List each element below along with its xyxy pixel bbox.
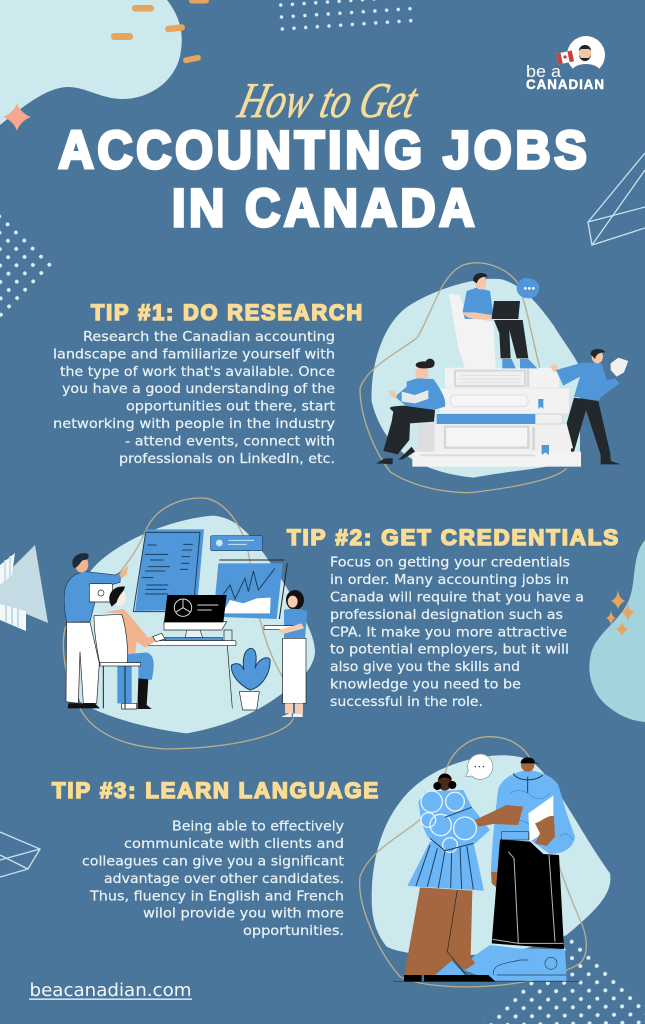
icon: pink star — [3, 103, 31, 131]
blob — [372, 755, 610, 956]
text block: tip 2: also give you the skills and — [330, 660, 520, 675]
tag panel — [211, 536, 263, 551]
heading: tip 2: TIP #2: GET CREDENTIALS — [287, 525, 620, 550]
bottom-left wire shape — [0, 832, 40, 877]
woman — [393, 773, 580, 982]
text block: tip 1: you have a good understanding of the — [62, 382, 335, 397]
heading: tip 3: TIP #3: LEARN LANGUAGE — [52, 778, 380, 803]
speech bubble — [517, 278, 539, 298]
title: How to Get: How to Get — [233, 73, 424, 128]
decorative triangles left — [0, 545, 48, 631]
person with laptop, right — [264, 590, 307, 717]
top-left blob with dashes — [0, 0, 209, 125]
text block: tip 2: Focus on getting your credentials — [330, 556, 570, 571]
text block: tip 2: to potential employers, but it will — [330, 643, 569, 658]
title: In Canada: IN CANADA — [172, 179, 478, 238]
text block: tip 3: colleagues can give you a significant — [82, 854, 344, 870]
text block: tip 3 — [82, 820, 344, 939]
text block: tip 3: wilol provide you with more — [143, 907, 344, 922]
text block: tip 1: networking with people in the industry — [53, 417, 335, 432]
illustration: team at computer — [63, 498, 315, 749]
text block: tip 1: the type of work that's available. Once — [60, 365, 335, 380]
text block: tip 2: successful in the role. — [330, 695, 483, 710]
chair — [449, 293, 496, 368]
seated person — [104, 586, 165, 709]
code panel — [133, 529, 204, 612]
text block: tip 1: landscape and familiarize yourself with — [53, 347, 335, 362]
top-right wire shape — [588, 153, 645, 245]
text block: tip 2: CPA. It make you more attractive — [330, 625, 567, 640]
person reading, left — [376, 359, 445, 464]
desk — [147, 630, 236, 708]
person standing, right — [550, 349, 628, 464]
text block: tip 1: professionals on LinkedIn, etc. — [119, 452, 335, 467]
bottom-right dot pattern — [478, 936, 645, 1024]
logo: be a Canadian: be a — [526, 62, 562, 81]
person standing with tablet — [64, 553, 128, 708]
text block: tip 1: opportunities out there, start — [126, 400, 335, 415]
text block: tip 2: professional designation such as — [330, 608, 563, 623]
text block: tip 1: - attend events, connect with — [125, 434, 335, 449]
text block: tip 2: knowledge you need to be — [330, 678, 521, 692]
illustration: people on books — [360, 263, 628, 493]
outline curve — [63, 498, 293, 749]
speech bubble — [466, 754, 493, 779]
text block: tip 2: Canada will require that you have a — [330, 590, 584, 606]
left dot pattern — [0, 214, 54, 320]
heading: tip 1: TIP #1: DO RESEARCH — [91, 300, 364, 325]
text block: tip 3: advantage over other candidates. — [104, 872, 344, 887]
blob — [372, 279, 580, 478]
man — [463, 757, 575, 981]
text block: tip 1: Research the Canadian accounting — [83, 330, 335, 345]
plant — [231, 648, 270, 710]
monitor — [164, 595, 227, 638]
top dot pattern — [278, 0, 415, 35]
outline curve — [360, 263, 567, 493]
right blob — [589, 540, 645, 722]
text block: tip 3: opportunities. — [243, 924, 344, 939]
logo: be a Canadian — [526, 36, 605, 92]
chair — [94, 614, 141, 708]
title: Accounting Jobs: ACCOUNTING JOBS — [58, 121, 590, 180]
text block: tip 2: in order. Many accounting jobs in — [330, 573, 569, 588]
text block: tip 3: Being able to effectively — [172, 820, 344, 835]
text block: tip 1 — [53, 330, 335, 467]
text block: tip 2 — [330, 556, 584, 710]
text block: tip 3: communicate with clients and — [124, 837, 344, 852]
outline curve — [360, 737, 586, 987]
blob — [73, 516, 315, 733]
chart panel — [213, 560, 287, 619]
text block: tip 3: Thus, fluency in English and French — [89, 889, 344, 904]
website link: beacanadian.com — [30, 980, 192, 1001]
logo: be a Canadian: CANADIAN — [526, 77, 605, 92]
books — [412, 368, 581, 467]
icon: orange sparkles — [606, 590, 635, 636]
illustration: two people talking — [360, 737, 610, 987]
person on chair — [463, 273, 537, 368]
